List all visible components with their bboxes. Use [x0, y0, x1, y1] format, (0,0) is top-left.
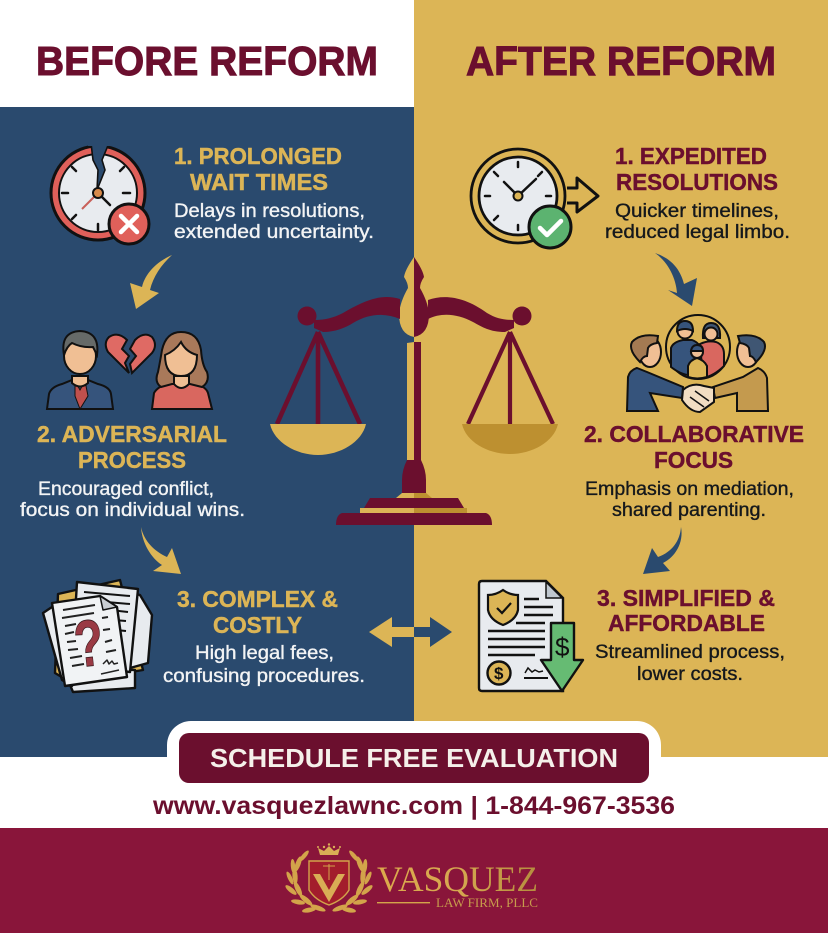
heading: before reform: BEFORE REFORM [36, 38, 378, 84]
text block: complex and costly: COSTLY [213, 612, 302, 638]
text block: expedited resolutions: RESOLUTIONS [616, 169, 778, 195]
panel: footer band [0, 828, 828, 933]
logo: rule [377, 902, 430, 903]
logo: wreath [284, 849, 374, 914]
scale: left half gold column [399, 257, 414, 460]
icon glyph: arrow dollar: $ [555, 632, 570, 662]
text block: prolonged wait times [174, 143, 374, 243]
scale: right pan [462, 424, 558, 454]
text block: simplified and affordable: Streamlined process, [595, 642, 785, 663]
icon glyph: question mark: ? [71, 605, 107, 681]
icon: fast clock [471, 149, 598, 248]
text block: expedited resolutions [605, 143, 790, 243]
logo: vasquez law firm [284, 843, 538, 914]
panel: before background [0, 107, 414, 757]
contact line: www.vasquezlawnc.com | 1-844-967-3536 [152, 792, 675, 820]
text block: adversarial process: 2. ADVERSARIAL [37, 421, 227, 447]
icon: broken clock [51, 140, 149, 244]
call to action button [179, 733, 649, 783]
icon: simplified document with savings [479, 581, 583, 691]
panel: after background [414, 0, 828, 757]
text block: complex and costly: High legal fees, [195, 643, 334, 664]
logo: subtitle: LAW FIRM, PLLC [436, 896, 538, 910]
arrow: step 2 to 3 after [643, 527, 682, 574]
text block: adversarial process: PROCESS [78, 447, 186, 473]
text block: complex and costly [163, 586, 365, 687]
scale: base [336, 460, 492, 525]
arrow: double headed before and after [369, 617, 452, 647]
text block: simplified and affordable: AFFORDABLE [608, 610, 765, 636]
text block: collaborative focus: shared parenting. [612, 500, 766, 521]
text block: prolonged wait times: 1. PROLONGED [174, 143, 342, 169]
scale: right rods [468, 332, 553, 424]
icon: handshake with family [627, 315, 768, 412]
text block: expedited resolutions: 1. EXPEDITED [615, 143, 767, 169]
scale: right half maroon column [414, 257, 429, 460]
scale: right beam [428, 297, 532, 332]
call to action: white surround [167, 721, 661, 801]
text block: prolonged wait times: WAIT TIMES [190, 169, 328, 195]
text block: simplified and affordable: lower costs. [637, 664, 743, 685]
icon: separated couple [47, 331, 212, 409]
text block: prolonged wait times: Delays in resolutions, [174, 201, 365, 222]
logo: crown [317, 843, 341, 855]
scale: left pan [270, 424, 366, 455]
text block: simplified and affordable [595, 585, 785, 685]
scale: left rods [277, 332, 360, 424]
text block: complex and costly: 3. COMPLEX & [177, 586, 338, 612]
text block: prolonged wait times: extended uncertainty. [174, 222, 374, 243]
chart: balance scale [270, 257, 558, 525]
logo: wordmark: VASQUEZ [377, 859, 538, 899]
logo: shield [309, 861, 349, 905]
heading: after reform: AFTER REFORM [466, 38, 776, 84]
scale: left beam [298, 297, 400, 332]
text block: collaborative focus [584, 421, 804, 521]
icon glyph: coin dollar: $ [494, 664, 504, 683]
arrow: step 2 to 3 before [141, 527, 181, 574]
icon: confusing documents [43, 580, 152, 692]
text block: collaborative focus: 2. COLLABORATIVE [584, 421, 804, 447]
text block: adversarial process [20, 421, 245, 521]
text block: collaborative focus: Emphasis on mediation, [585, 479, 794, 500]
call to action button: SCHEDULE FREE EVALUATION [210, 743, 618, 773]
text block: collaborative focus: FOCUS [654, 447, 733, 473]
arrow: step 1 to 2 before [130, 255, 172, 309]
text block: complex and costly: confusing procedures. [163, 666, 365, 687]
arrow: step 1 to 2 after [655, 253, 697, 306]
text block: simplified and affordable: 3. SIMPLIFIED & [597, 585, 775, 611]
text block: adversarial process: focus on individual wins. [20, 500, 245, 521]
text block: expedited resolutions: reduced legal limbo. [605, 222, 790, 243]
text block: expedited resolutions: Quicker timelines, [615, 201, 779, 222]
text block: adversarial process: Encouraged conflict, [38, 479, 214, 500]
